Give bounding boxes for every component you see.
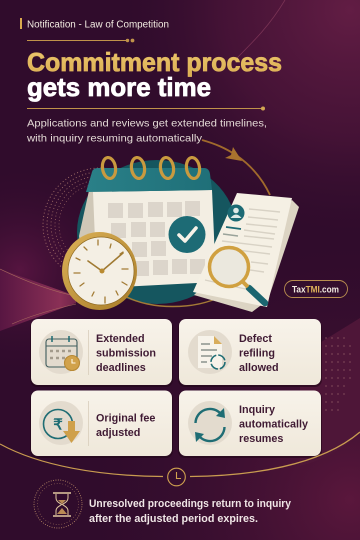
card: inquiry automatically resumes: Inquiry (239, 404, 275, 416)
subtitle: Applications and reviews get extended timelines, (27, 118, 267, 130)
badge: TaxTMI.com (284, 280, 348, 298)
magnifier (210, 248, 265, 303)
footer note: Unresolved proceedings return to inquiry (89, 498, 291, 510)
badge: TaxTMI.com: TaxTMI.com (292, 284, 339, 294)
title (27, 47, 282, 102)
card: original fee adjusted: adjusted (96, 427, 140, 439)
card: defect refiling allowed: allowed (239, 362, 279, 374)
calendar rings (101, 157, 201, 179)
icon: check badge (168, 216, 206, 253)
card: defect refiling allowed (178, 319, 322, 387)
card: original fee adjusted: Original fee (96, 412, 155, 424)
icon: document with magnifier (193, 193, 299, 312)
card: extended submission deadlines: submission (96, 348, 156, 360)
tag: notification category: Notification - Law of Competition (27, 20, 169, 30)
dots: right side pattern (325, 337, 351, 411)
divider above title (27, 39, 134, 42)
icon: clock (62, 232, 137, 310)
card: inquiry automatically resumes: automatically (239, 418, 308, 430)
title: gets more time (27, 72, 211, 102)
card: inquiry automatically resumes: resumes (239, 433, 283, 445)
icon: rupee with down arrow: ₹ (53, 416, 63, 434)
card: extended submission deadlines: Extended (96, 333, 145, 345)
icon: refresh arrows (195, 408, 225, 442)
footer note: after the adjusted period expires. (89, 513, 258, 525)
divider below title (27, 106, 265, 110)
card: defect refiling allowed: refiling (239, 348, 275, 360)
subtitle (26, 118, 267, 144)
card: extended submission deadlines: deadlines (96, 362, 146, 374)
card: extended submission deadlines (30, 319, 173, 387)
calendar date grid (108, 201, 205, 276)
gold arc with clock icon (0, 432, 360, 486)
dotted halftone circle behind calendar (43, 168, 157, 282)
card: original fee adjusted (30, 390, 173, 458)
icon: hourglass in dotted ring (34, 480, 82, 528)
subtitle: with inquiry resuming automatically (26, 132, 203, 144)
card: inquiry automatically resumes (178, 390, 322, 458)
teal circle behind calendar (77, 160, 237, 306)
icon: document with refresh (198, 336, 225, 369)
icon: small calendar (46, 336, 80, 370)
card: defect refiling allowed: Defect (239, 333, 272, 345)
footer note (89, 498, 291, 525)
arrow: curved timeline (202, 140, 270, 195)
title: Commitment process (27, 47, 282, 77)
icon: calendar (79, 157, 216, 288)
icon: rupee with down arrow (44, 410, 80, 443)
